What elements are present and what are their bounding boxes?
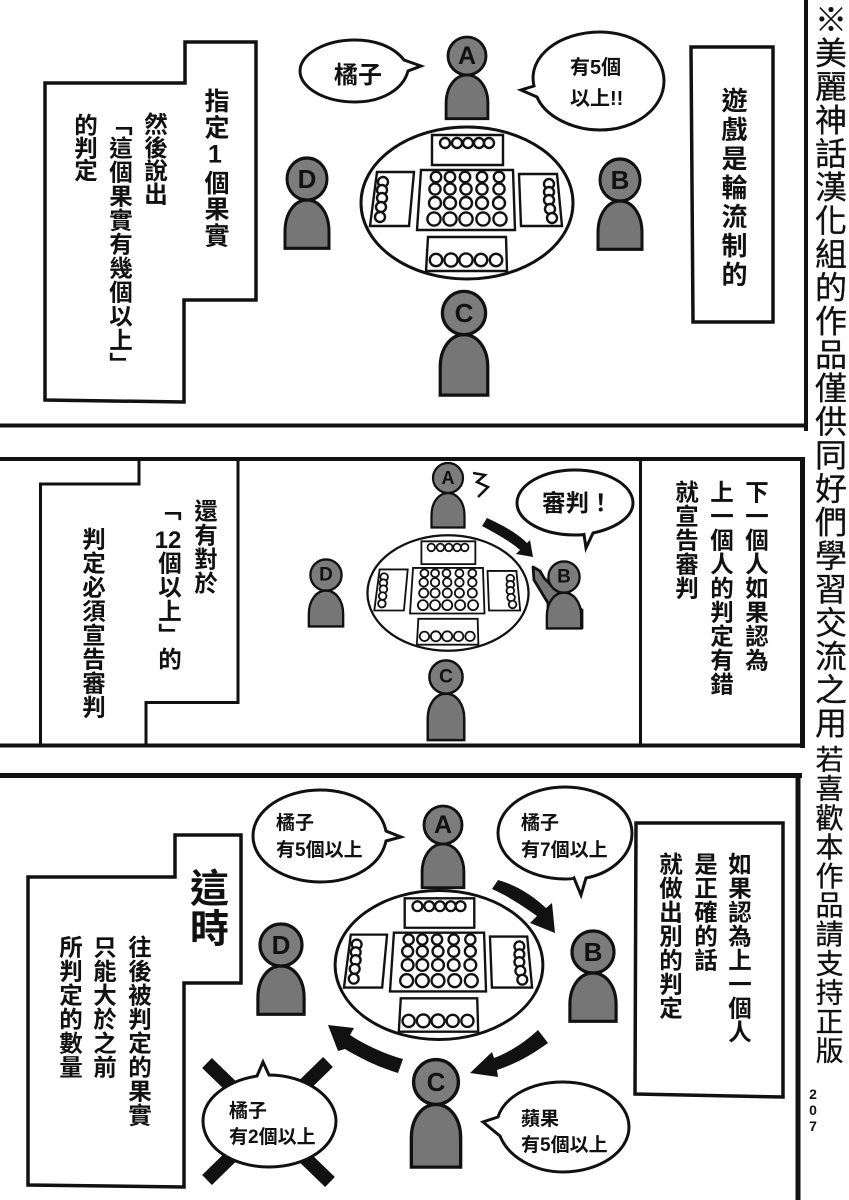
callout: next player may call — [672, 480, 769, 696]
callout: at this moment: 所判定的數量 — [56, 935, 83, 1079]
callout: must call on twelve: 個以上」的 — [155, 551, 182, 671]
callout: must call on twelve — [40, 460, 238, 745]
callout: must call on twelve: 12 — [155, 527, 181, 554]
arrow: A to B — [492, 880, 555, 933]
crossed out bubble: orange two: 橘子 — [229, 1100, 267, 1122]
speech bubble: apple five — [483, 1082, 629, 1172]
table board — [335, 891, 543, 1039]
panel 3: make another call — [0, 775, 802, 1200]
player C — [411, 1060, 461, 1167]
callout: next player may call: 下一個人如果認為 — [742, 480, 769, 672]
speech bubble: orange seven — [498, 787, 632, 895]
speech bubble: five or more: 有5個 — [570, 56, 621, 79]
speech bubble: apple five: 有5個以上 — [521, 1134, 608, 1156]
arrow: C to D — [328, 1025, 403, 1073]
squiggle: shock mark — [473, 473, 488, 497]
player D — [285, 158, 329, 248]
player B: B — [584, 937, 602, 967]
player A: A — [458, 42, 476, 70]
callout: if correct call another — [635, 823, 783, 1097]
speech bubble: five or more: 以上!! — [570, 87, 623, 110]
player B: B — [611, 165, 629, 195]
player C: C — [455, 298, 474, 328]
callout: game is turn based: 遊戲是輪流制的 — [718, 87, 748, 290]
player A: A — [442, 468, 454, 488]
crossed out bubble: orange two: 有2個以上 — [229, 1126, 316, 1148]
table board — [367, 535, 529, 651]
callout: name a fruit: 的判定 — [71, 113, 98, 182]
player A — [446, 37, 488, 119]
player C: C — [439, 666, 453, 688]
arrow: A to B — [482, 518, 533, 557]
player A — [422, 806, 464, 888]
callout: if correct call another: 就做出別的判定 — [656, 852, 683, 1020]
player B — [570, 931, 616, 1021]
callout: must call on twelve: 還有對於 — [191, 499, 218, 595]
player C — [428, 660, 464, 740]
speech bubble: five or more — [521, 32, 664, 130]
speech bubble: orange — [300, 40, 421, 102]
callout: at this moment: 只能大於之前 — [90, 935, 117, 1079]
side credit text: 若喜歡本作品請支持正版 — [812, 745, 844, 1065]
table board — [361, 127, 573, 279]
callout: game is turn based — [691, 47, 773, 322]
speech bubble: orange seven: 有7個以上 — [521, 839, 608, 861]
player D — [258, 924, 304, 1014]
callout: next player may call: 上一個人的判定有錯 — [707, 480, 734, 696]
player B — [598, 159, 642, 249]
panel 2: call judgement — [0, 457, 802, 748]
callout: name a fruit: 然後說出 — [141, 112, 168, 205]
page number: 207 — [805, 1086, 821, 1134]
player D: D — [298, 164, 316, 194]
speech bubble: judgement: 審判！ — [542, 490, 612, 516]
panel 1: turn taking — [0, 0, 806, 431]
player D: D — [319, 564, 333, 586]
speech bubble: orange five: 橘子 — [276, 812, 314, 834]
player A — [432, 463, 464, 528]
player C: C — [427, 1067, 446, 1097]
callout: at this moment: 這時 — [184, 868, 229, 948]
side credit text: ※美麗神話漢化組的作品僅供同好們學習交流之用 — [811, 3, 847, 740]
player B pointing — [533, 561, 582, 628]
speech bubble: orange seven: 橘子 — [521, 812, 559, 834]
callout: name a fruit — [45, 42, 256, 402]
player C — [440, 291, 488, 395]
player B pointing: B — [557, 566, 571, 588]
speech bubble: orange five: 有5個以上 — [276, 839, 363, 861]
speech bubble: orange: 橘子 — [334, 62, 382, 89]
speech bubble: orange five — [253, 790, 401, 882]
callout: must call on twelve: 判定必須宣告審判 — [79, 527, 106, 720]
player D: D — [272, 930, 290, 960]
speech bubble: apple five: 蘋果 — [521, 1108, 559, 1130]
callout: must call on twelve: 「 — [155, 497, 181, 521]
callout: name a fruit: 指定1個果實 — [201, 88, 230, 249]
callout: at this moment: 往後被判定的果實 — [125, 935, 152, 1127]
speech bubble: judgement — [517, 470, 633, 548]
player D — [309, 559, 343, 626]
callout: at this moment — [28, 835, 241, 1187]
callout: if correct call another: 是正確的話 — [691, 852, 718, 972]
callout: name a fruit: 「這個果實有幾個以上」 — [106, 112, 133, 376]
callout: next player may call: 就宣告審判 — [672, 480, 699, 601]
arrow: B to C — [470, 1030, 548, 1077]
player A: A — [434, 811, 452, 839]
side credit text — [811, 3, 847, 1065]
callout: if correct call another: 如果認為上一個人 — [725, 852, 752, 1044]
crossed out bubble: orange two — [203, 1062, 336, 1182]
